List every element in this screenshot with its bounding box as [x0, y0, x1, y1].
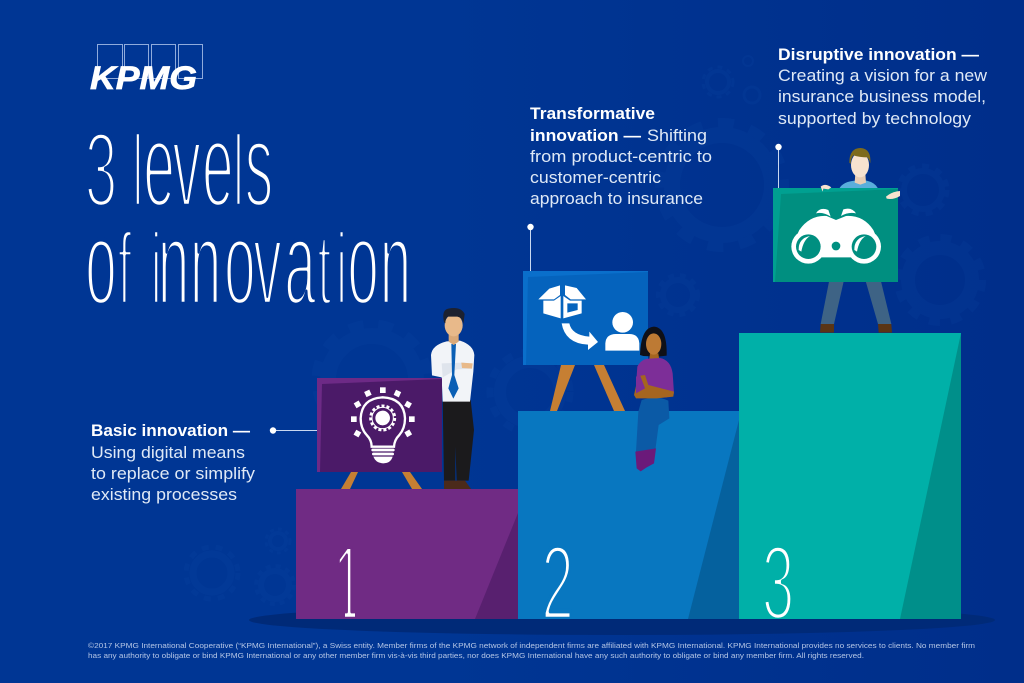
figure: man with binoculars board	[820, 148, 892, 333]
woman shirt	[635, 358, 674, 397]
woman neck and face	[649, 353, 659, 360]
title: f	[118, 212, 145, 326]
third man hair	[849, 148, 870, 164]
callout: basic innovation: Basic innovation —	[91, 422, 251, 440]
woman arms	[634, 375, 674, 398]
board 2 easel legs	[550, 365, 625, 411]
podium 1	[296, 489, 518, 619]
footer disclaimer: has any authority to obligate or bind KPMG International or any other member firm vis-à-vis third parties, nor does KPMG International have any such authority to obligate or bind any member firm. All rights reserved.	[88, 651, 864, 660]
callout: disruptive innovation: Creating a vision for a new	[778, 67, 987, 85]
callout: transformative innovation: Shifting	[647, 127, 707, 145]
title: t	[318, 212, 331, 326]
leader line 3	[775, 144, 782, 188]
podium number 2: 2	[542, 524, 574, 641]
callout: disruptive innovation: insurance business model,	[778, 88, 986, 106]
man hair	[443, 308, 465, 324]
footer disclaimer	[88, 641, 975, 660]
callout: disruptive innovation: supported by technology	[778, 110, 972, 128]
title: n	[158, 195, 189, 330]
title: n	[380, 195, 411, 330]
footer disclaimer: ©2017 KPMG International Cooperative (“KPMG International”), a Swiss entity. Member firms of the KPMG network of independent firms are affiliated with KPMG International. KPMG International provides no services to clients. No member firm	[88, 641, 975, 650]
callout: transformative innovation: customer-centric	[530, 169, 661, 187]
podium number 3: 3	[762, 524, 794, 641]
icon: box to customer	[538, 285, 639, 351]
title: 3	[85, 111, 117, 228]
callout: transformative innovation: approach to insurance	[530, 190, 703, 208]
title: i	[336, 212, 347, 326]
podium 2	[518, 411, 739, 641]
third man shoes	[820, 324, 892, 333]
callout: disruptive innovation	[775, 46, 987, 188]
title: o	[347, 195, 379, 330]
man arm	[442, 363, 473, 377]
figure: woman seated	[634, 327, 674, 471]
title: o	[224, 195, 256, 330]
podium number 1: 1	[334, 524, 363, 642]
title: a	[284, 195, 316, 330]
man trousers	[443, 400, 474, 481]
icon: lightbulb with gear	[351, 387, 415, 463]
title: l	[233, 114, 244, 228]
callout: transformative innovation	[527, 105, 712, 271]
ground shadow	[249, 605, 995, 635]
title: s	[245, 97, 273, 232]
icon: binoculars	[791, 209, 881, 264]
KPMG logo: KPMG	[90, 60, 197, 96]
title: e	[143, 97, 175, 232]
title: l	[133, 114, 143, 228]
title: v	[172, 97, 201, 232]
third man neck and face	[855, 173, 866, 185]
title: i	[151, 212, 162, 326]
callout: basic innovation	[91, 422, 317, 504]
board 3	[773, 188, 898, 282]
background gears	[186, 56, 982, 604]
callout: transformative innovation: Transformative	[530, 105, 655, 123]
woman hair	[640, 327, 667, 357]
title: n	[190, 195, 221, 330]
podium 3	[739, 333, 961, 641]
man shoes	[444, 481, 471, 489]
leader line 2	[527, 224, 534, 271]
title: e	[202, 97, 233, 232]
man tie	[448, 344, 459, 399]
callout: transformative innovation: innovation —	[530, 127, 642, 145]
man neck and face	[449, 333, 459, 345]
third man trousers	[821, 280, 891, 324]
man shirt	[431, 341, 474, 402]
board 1 easel legs	[341, 472, 422, 489]
KPMG logo	[90, 44, 202, 96]
leader line 1	[270, 427, 317, 434]
callout: transformative innovation: from product-centric to	[530, 148, 712, 166]
callout: basic innovation: to replace or simplify	[91, 465, 256, 483]
board 2	[523, 271, 648, 365]
third man shirt	[839, 181, 878, 188]
title	[85, 97, 411, 330]
title: o	[85, 195, 117, 330]
figure: man in white shirt	[431, 308, 474, 489]
woman boots	[635, 448, 656, 471]
callout: disruptive innovation: Disruptive innovation —	[778, 46, 980, 64]
board 1	[317, 378, 442, 472]
callout: basic innovation: Using digital means	[91, 444, 245, 462]
title: v	[253, 195, 282, 330]
woman jeans	[636, 398, 669, 452]
callout: basic innovation: existing processes	[91, 486, 237, 504]
third man hands	[821, 185, 900, 199]
